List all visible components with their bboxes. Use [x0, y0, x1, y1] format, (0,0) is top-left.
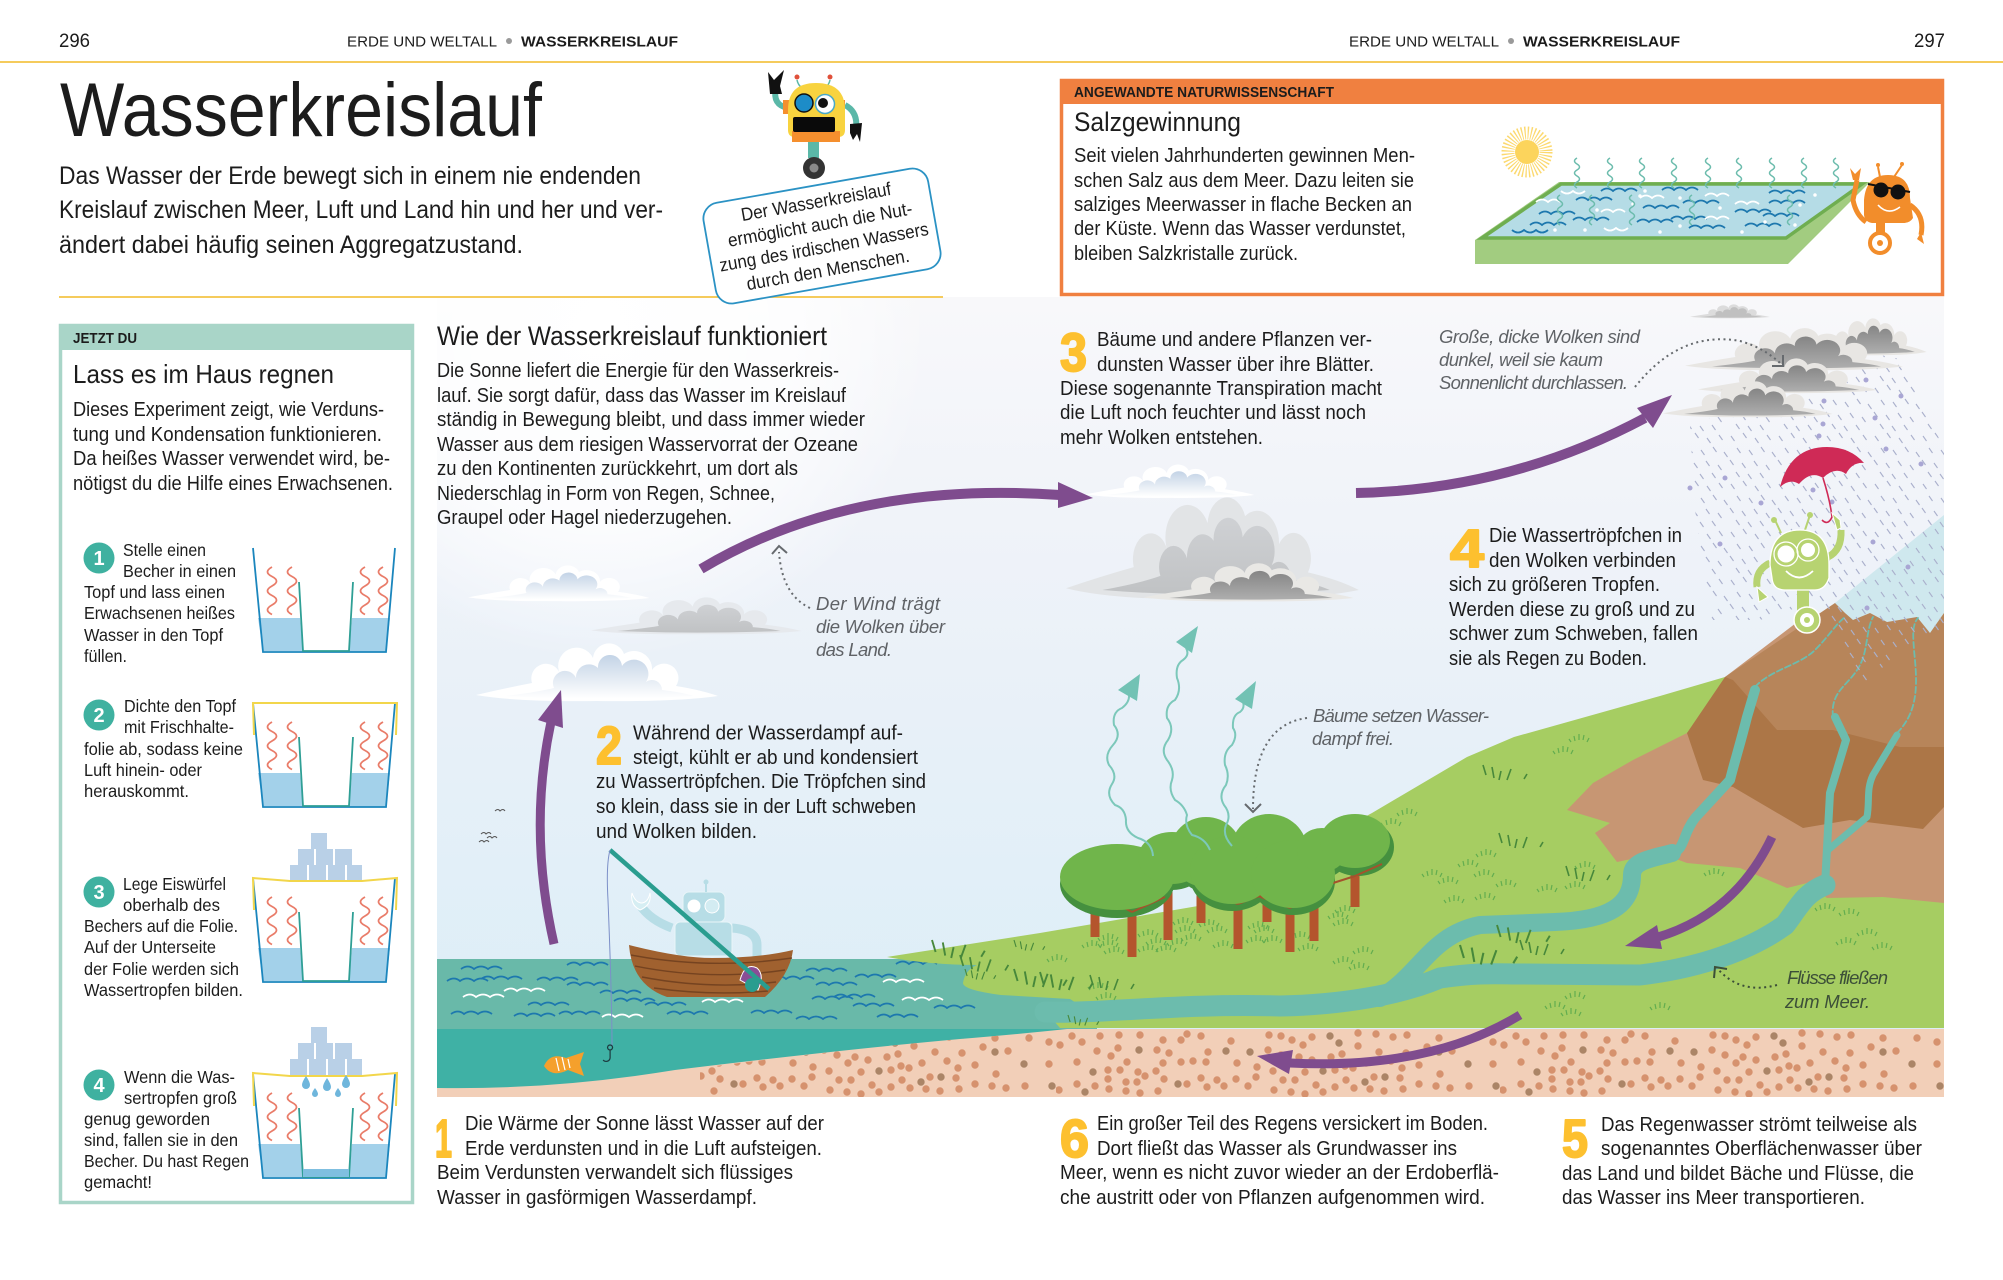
text: step 3	[1060, 323, 1382, 449]
title: Wasserkreislauf	[60, 68, 543, 153]
orange robot	[1850, 162, 1924, 253]
note: clouds: dunkel, weil sie kaum	[1439, 349, 1603, 370]
page header: WASSERKREISLAUF	[1523, 34, 1680, 50]
note: trees: Bäume setzen Wasser-	[1313, 705, 1489, 726]
sky and landscape panel	[437, 297, 1944, 1097]
step 3: Wassertropfen bilden.	[84, 980, 243, 1000]
text: how the cycle works: Die Sonne liefert die Energie für den Wasserkreis-	[437, 360, 839, 382]
arrow: to rain clouds	[1356, 395, 1672, 493]
note: wind: das Land.	[816, 639, 892, 660]
note: rivers: zum Meer.	[1784, 991, 1870, 1012]
note: trees: dampf frei.	[1312, 728, 1394, 749]
text: step 4: Die Wassertröpfchen in	[1489, 525, 1682, 547]
cloud: storm C	[1698, 358, 1877, 393]
page header: 296	[59, 31, 90, 52]
text: step 4: den Wolken verbinden	[1489, 550, 1676, 572]
step 4: sertropfen groß	[124, 1088, 237, 1108]
cloud: storm D	[1663, 381, 1832, 417]
text: step 2: 2	[596, 716, 622, 776]
text: step 3: die Luft noch feuchter und lässt noch	[1060, 402, 1366, 424]
mountain	[1567, 515, 1944, 903]
text: step 5: 5	[1562, 1109, 1588, 1169]
waves	[447, 962, 975, 1019]
text: step 6: 6	[1060, 1109, 1089, 1169]
dotted pointers	[772, 339, 1783, 988]
step 1: Wasser in den Topf	[84, 625, 223, 645]
text: step 4: 4	[1450, 519, 1484, 579]
arrow: ground water	[1257, 1015, 1520, 1074]
text: step 4: sie als Regen zu Boden.	[1449, 648, 1647, 670]
cloud: light grey	[591, 597, 802, 634]
text: step 1: Beim Verdunsten verwandelt sich flüssiges	[437, 1162, 793, 1184]
step 4: 4	[93, 1075, 105, 1097]
text: how the cycle works: lauf. Sie sorgt dafür, dass das Wasser im Kreislauf	[437, 385, 846, 407]
panel heading: Salzgewinnung	[1074, 107, 1241, 137]
panel label: JETZT DU	[73, 331, 137, 347]
panel text: Seit vielen Jahrhunderten gewinnen Men-	[1074, 145, 1415, 167]
text: step 5: sogenanntes Oberflächenwasser über	[1601, 1138, 1922, 1160]
arrow: wind	[701, 482, 1093, 569]
text: step 4	[1449, 519, 1698, 670]
text: step 6: Meer, wenn es nicht zuvor wieder an der Erdoberflä-	[1060, 1162, 1499, 1184]
text: step 1	[435, 1109, 824, 1209]
step 2: herauskommt.	[84, 781, 189, 801]
step 1: Topf und lass einen	[84, 582, 225, 602]
pot 3 with ice	[253, 833, 397, 982]
step 3: oberhalb des	[123, 895, 220, 915]
note: clouds: Sonnenlicht durchlassen.	[1439, 372, 1628, 393]
cloud: storm A	[1685, 328, 1903, 370]
note: wind	[816, 593, 946, 660]
rivers	[1045, 617, 1918, 1012]
arrow: rising vapour	[538, 690, 563, 944]
boat with robot	[603, 850, 793, 1061]
text: step 5	[1562, 1109, 1922, 1209]
callout	[701, 166, 943, 306]
step 1: Erwachsenen heißes	[84, 603, 235, 623]
text: step 5: Das Regenwasser strömt teilweise als	[1601, 1114, 1917, 1136]
step 2: mit Frischhalte-	[124, 717, 234, 737]
text: how the cycle works: zu den Kontinenten zurückkehrt, um dort als	[437, 458, 798, 480]
salt pond	[1475, 158, 1870, 264]
text: step 5: das Wasser ins Meer transportieren.	[1562, 1187, 1865, 1209]
step 2	[84, 696, 243, 801]
text: step 6: Ein großer Teil des Regens versickert im Boden.	[1097, 1113, 1488, 1135]
step 3	[84, 874, 243, 1000]
note: wind: Der Wind trägt	[816, 593, 941, 614]
text: step 2: Während der Wasserdampf auf-	[633, 722, 903, 744]
text: step 4: schwer zum Schweben, fallen	[1449, 623, 1698, 645]
yellow robot	[768, 70, 862, 179]
pot 4 with ice and drops	[253, 1027, 397, 1178]
note: rivers: Flüsse fließen	[1787, 967, 1888, 988]
panel intro	[73, 399, 393, 495]
panel text: der Küste. Wenn das Wasser verdunstet,	[1074, 218, 1406, 240]
clouds	[468, 304, 1927, 701]
step 1	[84, 540, 236, 666]
yellow rule	[59, 296, 943, 298]
step 3: 3	[93, 882, 105, 904]
text: step 3: dunsten Wasser über ihre Blätter.	[1097, 354, 1374, 376]
step 4: gemacht!	[84, 1172, 152, 1192]
cloud: dark grey front	[1143, 563, 1354, 601]
panel text: schen Salz aus dem Meer. Dazu leiten sie	[1074, 170, 1414, 192]
text: step 2: steigt, kühlt er ab und kondensiert	[633, 747, 918, 769]
soil	[437, 1029, 1944, 1097]
text: step 4: sich zu größeren Tropfen.	[1449, 574, 1660, 596]
text: how the cycle works: Wasser aus dem riesigen Wasservorrat der Ozeane	[437, 434, 858, 456]
callout: Der Wasserkreislauf	[739, 178, 893, 225]
text: step 3: 3	[1060, 323, 1087, 383]
panel text	[1074, 145, 1415, 265]
step 1: füllen.	[84, 646, 127, 666]
panel intro: nötigst du die Hilfe eines Erwachsenen.	[73, 473, 393, 495]
note: trees	[1312, 705, 1489, 749]
note: clouds	[1439, 326, 1641, 393]
text: step 2	[596, 716, 926, 843]
sky	[437, 297, 1944, 1032]
intro text: Kreislauf zwischen Meer, Luft und Land hin und her und ver-	[59, 196, 663, 224]
step 1: Stelle einen	[123, 540, 206, 560]
page header: WASSERKREISLAUF	[521, 34, 678, 50]
panel intro: Da heißes Wasser verwendet wird, be-	[73, 448, 390, 470]
text: step 3: Bäume und andere Pflanzen ver-	[1097, 329, 1372, 351]
callout: zung des irdischen Wassers	[718, 218, 930, 276]
step 2: folie ab, sodass keine	[84, 739, 243, 759]
trees	[1060, 814, 1394, 957]
text: step 6	[1060, 1109, 1499, 1209]
callout: ermöglicht auch die Nut-	[726, 198, 914, 251]
sea	[437, 959, 1097, 1097]
text: step 2: und Wolken bilden.	[596, 821, 757, 843]
pot 2 with foil	[253, 703, 397, 807]
step 4	[84, 1067, 249, 1192]
land	[887, 677, 1944, 1028]
step 4: genug geworden	[84, 1109, 210, 1129]
panel: Jetzt du experiment	[59, 324, 414, 1202]
text: how the cycle works	[437, 360, 865, 529]
heading: how the cycle works: Wie der Wasserkreislauf funktioniert	[437, 321, 827, 351]
step 2: Luft hinein- oder	[84, 760, 202, 780]
vapour arrows	[1107, 626, 1256, 856]
text: step 6: Dort fließt das Wasser als Grundwasser ins	[1097, 1138, 1457, 1160]
text: step 4: Werden diese zu groß und zu	[1449, 599, 1695, 621]
text: step 1: 1	[435, 1109, 452, 1169]
panel: Salzgewinnung	[1060, 79, 1944, 294]
page header: 297	[1914, 31, 1945, 52]
pot 1	[253, 548, 395, 652]
step 3: der Folie werden sich	[84, 959, 239, 979]
text: step 6: che austritt oder von Pflanzen aufgenommen wird.	[1060, 1187, 1485, 1209]
intro text: Das Wasser der Erde bewegt sich in einem nie endenden	[59, 162, 641, 190]
step 4: Becher. Du hast Regen	[84, 1151, 249, 1171]
text: step 1: Erde verdunsten und in die Luft aufsteigen.	[465, 1138, 822, 1160]
step 2: 2	[93, 705, 105, 727]
text: how the cycle works: Niederschlag in Form von Regen, Schnee,	[437, 483, 775, 505]
text: step 2: zu Wassertröpfchen. Die Tröpfchen sind	[596, 771, 926, 793]
cloud: white upper left	[468, 565, 650, 601]
note: rivers	[1784, 967, 1888, 1012]
icon: sun	[1508, 133, 1546, 171]
text: step 1: Wasser in gasförmigen Wasserdampf.	[437, 1187, 757, 1209]
text: step 1: Die Wärme der Sonne lässt Wasser auf der	[465, 1113, 824, 1135]
page header: ERDE UND WELTALL	[347, 34, 497, 50]
birds	[479, 810, 505, 842]
grass tufts	[932, 734, 1892, 1026]
rain	[1690, 355, 1944, 690]
page header: ERDE UND WELTALL	[1349, 34, 1499, 50]
step 3: Bechers auf die Folie.	[84, 916, 238, 936]
intro text: ändert dabei häufig seinen Aggregatzustand.	[59, 231, 523, 259]
cloud: white centre	[1085, 464, 1254, 498]
step 4: sind, fallen sie in den	[84, 1130, 238, 1150]
panel text: salziges Meerwasser in flache Becken an	[1074, 194, 1412, 216]
step 2: Dichte den Topf	[124, 696, 236, 716]
green robot with umbrella	[1757, 447, 1864, 633]
step 3: Lege Eiswürfel	[123, 874, 226, 894]
callout: durch den Menschen.	[745, 245, 911, 294]
panel intro: Dieses Experiment zeigt, wie Verduns-	[73, 399, 384, 421]
text: how the cycle works: Graupel oder Hagel niederzugehen.	[437, 507, 732, 529]
cloud: storm B	[1808, 318, 1927, 355]
fish	[544, 1052, 584, 1076]
note: clouds: Große, dicke Wolken sind	[1439, 326, 1641, 347]
text: step 2: so klein, dass sie in der Luft schweben	[596, 796, 916, 818]
step 1: Becher in einen	[123, 561, 236, 581]
cloud: white over rising arrow	[476, 643, 718, 701]
cloud: storm small	[1690, 304, 1770, 318]
panel intro: tung und Kondensation funktionieren.	[73, 424, 382, 446]
step 1: 1	[93, 548, 105, 570]
panel heading: Lass es im Haus regnen	[73, 359, 334, 389]
text: step 3: mehr Wolken entstehen.	[1060, 427, 1263, 449]
panel label: ANGEWANDTE NATURWISSENSCHAFT	[1074, 85, 1334, 101]
page header	[0, 31, 2003, 63]
step 3: Auf der Unterseite	[84, 937, 216, 957]
step 4: Wenn die Was-	[124, 1067, 235, 1087]
panel text: bleiben Salzkristalle zurück.	[1074, 243, 1298, 265]
intro text	[59, 162, 663, 259]
note: wind: die Wolken über	[816, 616, 946, 637]
text: step 3: Diese sogenannte Transpiration macht	[1060, 378, 1382, 400]
text: step 5: das Land und bildet Bäche und Flüsse, die	[1562, 1163, 1914, 1185]
arrow: surface water	[1625, 837, 1772, 949]
text: how the cycle works: ständig in Bewegung bleibt, und dass immer wieder	[437, 409, 865, 431]
cloud: large grey	[1066, 497, 1359, 599]
